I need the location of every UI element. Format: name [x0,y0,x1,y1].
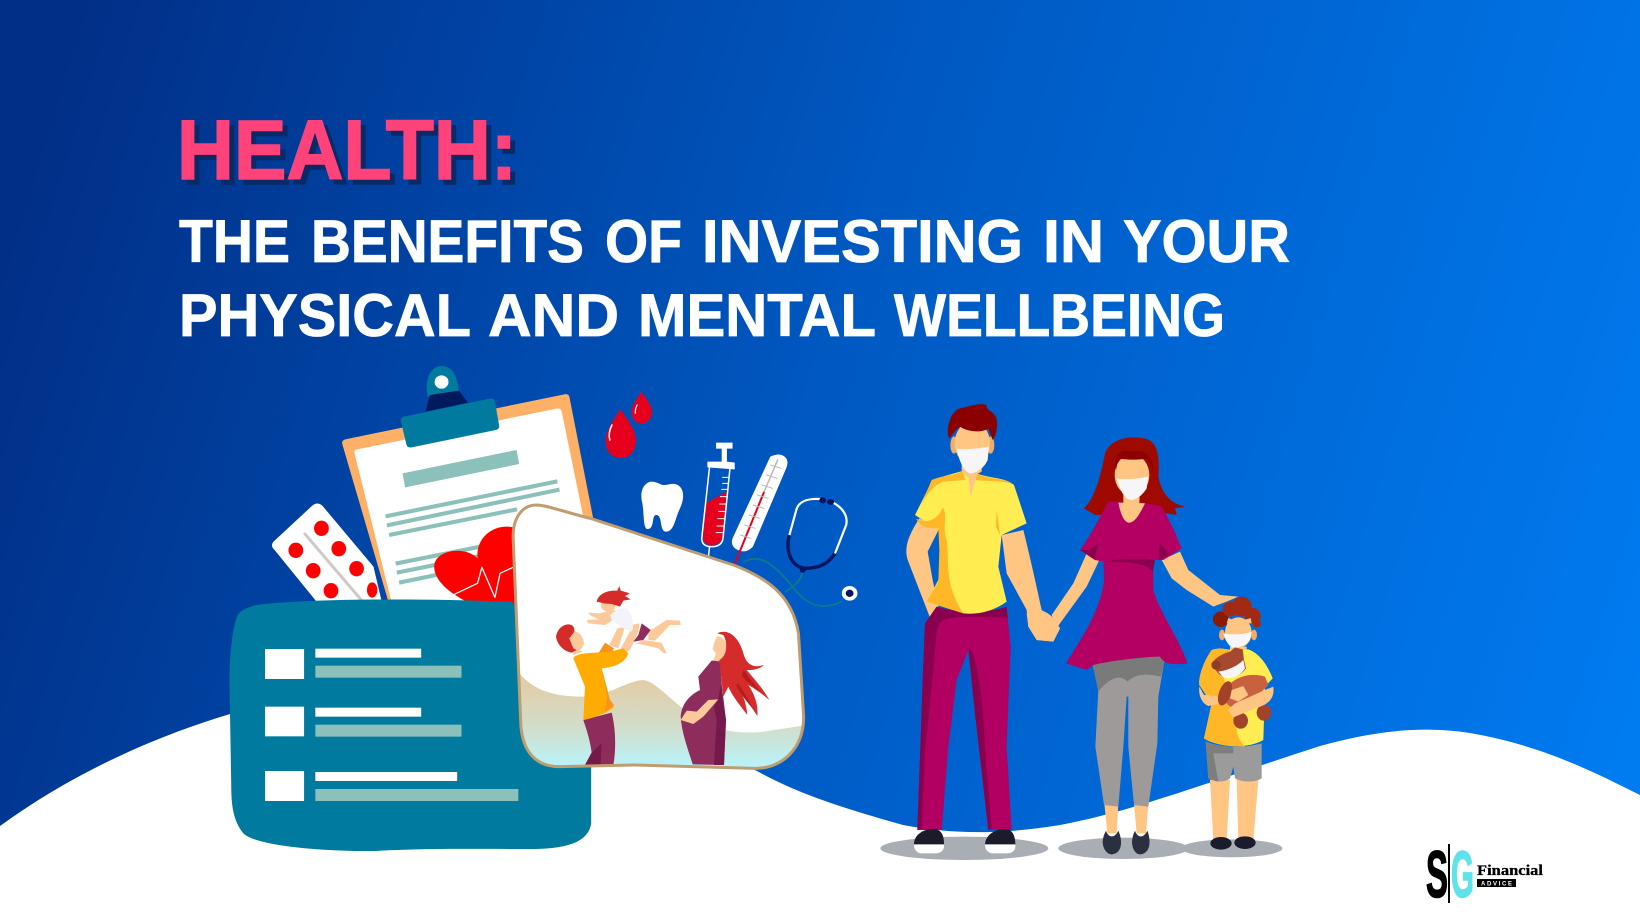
syringe [702,443,735,558]
tooth [641,482,683,532]
thermometer [732,455,787,565]
family with masks [880,404,1282,860]
subtitle line 1: YOUR [1123,208,1290,275]
title [177,103,1290,349]
woman [1052,437,1238,854]
flying child [587,586,681,653]
subtitle line 2: AND [488,282,619,349]
heart with pulse [434,527,523,614]
subtitle line 1 [179,208,1290,275]
subtitle line 1: THE [179,208,290,275]
subtitle line 1: OF [605,208,682,275]
logo: SG Financial Advice [1426,837,1543,911]
white wave [0,698,1640,924]
logo word Financial: Financial [1477,863,1543,879]
subtitle line 2 [179,282,1225,349]
logo: SG Financial Advice: G [1451,837,1474,911]
logo tag ADVICE: ADVICE [1481,882,1512,888]
medical illustration [229,366,857,851]
heading: HEALTH: HEALTH: [182,108,522,202]
subtitle line 1: IN [1043,208,1104,275]
teddy bear [1211,647,1274,729]
teal folder [229,599,591,851]
boy shirt [1199,649,1273,747]
subtitle line 2: PHYSICAL [179,282,471,349]
logo divider [1448,844,1450,903]
hands held [1027,610,1060,642]
heading: HEALTH: HEALTH: [177,103,517,197]
man [906,404,1060,853]
subtitle line 1: INVESTING [702,208,1023,275]
subtitle line 1: BENEFITS [311,208,584,275]
stethoscope [744,497,857,606]
logo: SG Financial Advice: S [1426,837,1448,911]
blood drops [605,392,652,458]
subtitle line 2: MENTAL [638,282,876,349]
clipboard clip [401,366,499,447]
ground shadows [880,837,1282,860]
mother [681,632,769,765]
family photo frame [513,505,807,770]
father [556,623,639,765]
subtitle line 2: WELLBEING [894,282,1225,349]
clipboard [342,366,603,617]
boy with teddy [1199,597,1274,850]
boy head [1213,597,1261,658]
pill blister pack [272,503,382,603]
